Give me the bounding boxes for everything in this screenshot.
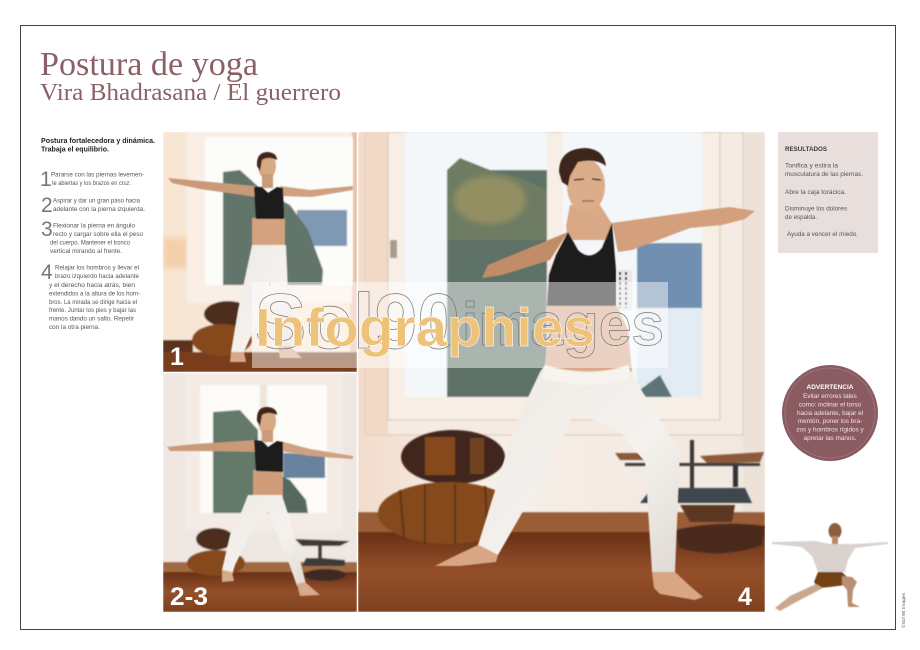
- callout: advertencia: hacia adelante, bajar el: [797, 410, 863, 417]
- callout: advertencia: Evitar errores tales: [803, 393, 857, 400]
- step 3 text: 3: [41, 218, 53, 241]
- watermark: Infographies: [255, 298, 595, 358]
- step 1 text: 1: [40, 168, 52, 191]
- step 4 text: con la otra pierna.: [49, 324, 100, 331]
- panel: resultados: Tonifica y estira la: [785, 162, 838, 170]
- step 4 text: extendidos a la altura de los hom-: [49, 290, 140, 298]
- panel: resultados: Disminuye los dolores: [785, 206, 848, 212]
- callout: advertencia: zos y hombros rígidos y: [796, 426, 865, 434]
- photo credit: ©Sol 90 Images: [900, 592, 907, 628]
- step 3 text: [41, 218, 143, 255]
- step 3 text: Flexionar la pierna en ángulo: [53, 222, 135, 230]
- photo number 2-3: 2-3: [170, 583, 208, 611]
- step 4 text: 4: [41, 261, 53, 284]
- step 4 text: brazo izquierdo hacia adelante: [55, 273, 139, 280]
- step 1 text: te abiertas y los brazos en cruz.: [52, 180, 131, 187]
- title: [40, 46, 341, 106]
- callout: advertencia: apretar las manos.: [804, 435, 857, 442]
- step 2 text: adelante con la pierna izquierda.: [53, 206, 145, 213]
- photo number 4: 4: [738, 583, 752, 611]
- step 4 text: bros. La mirada se dirige hacia el: [49, 299, 138, 306]
- intro text block: Trabaja el equilibrio.: [41, 146, 109, 154]
- watermark: images: [462, 291, 664, 358]
- panel: resultados: musculatura de las piernas.: [785, 171, 863, 178]
- photo 4: warrior pose: [358, 132, 765, 612]
- panel: resultados: Abre la caja torácica.: [785, 189, 846, 196]
- balance scale and bowl: [615, 440, 765, 553]
- panel: resultados: Ayuda a vencer el miedo.: [787, 231, 858, 238]
- callout: advertencia: mentón, poner los bra-: [798, 418, 862, 425]
- step 4 text: y el derecho hacia atrás, bien: [49, 282, 135, 289]
- step 3 text: del cuerpo. Mantener el tronco: [50, 240, 130, 246]
- illustration: anatomical warrior figure: [772, 523, 888, 611]
- callout: advertencia: ADVERTENCIA: [807, 384, 854, 391]
- step 2 text: 2: [41, 194, 53, 217]
- panel: resultados: de espalda.: [785, 214, 817, 221]
- watermark: [252, 277, 668, 368]
- intro text block: [41, 138, 155, 154]
- watermark: Sol90: [255, 277, 460, 365]
- callout: advertencia: como: inclinar el torso: [799, 402, 862, 408]
- title: Vira Bhadrasana / El guerrero: [40, 79, 341, 106]
- intro text block: Postura fortalecedora y dinámica.: [41, 138, 155, 145]
- callout: advertencia: [782, 365, 878, 461]
- step 1 text: Pararse con las piernas levemen-: [51, 172, 144, 178]
- step 4 text: Relajar los hombros y llevar el: [55, 264, 140, 272]
- photo 1: standing with arms extended: [163, 132, 357, 372]
- woman figure: [435, 148, 755, 600]
- panel: resultados: RESULTADOS: [785, 146, 827, 153]
- panel: resultados: [778, 132, 878, 253]
- step 2 text: [41, 194, 145, 217]
- poufs: [378, 430, 518, 544]
- step 4 text: [41, 261, 140, 331]
- step 2 text: Aspirar y dar un gran paso hacia: [53, 198, 140, 204]
- step 4 text: frente. Juntar los pies y bajar las: [49, 307, 137, 314]
- photo number 1: 1: [170, 343, 184, 371]
- photo 2-3: stepping wide: [163, 373, 357, 612]
- title: Postura de yoga: [40, 46, 258, 83]
- step 3 text: vertical mirando al frente.: [50, 248, 122, 255]
- step 1 text: [40, 168, 144, 191]
- step 4 text: manos dando un salto. Repetir: [49, 316, 135, 322]
- step 3 text: recto y cargar sobre ella el peso: [53, 231, 143, 238]
